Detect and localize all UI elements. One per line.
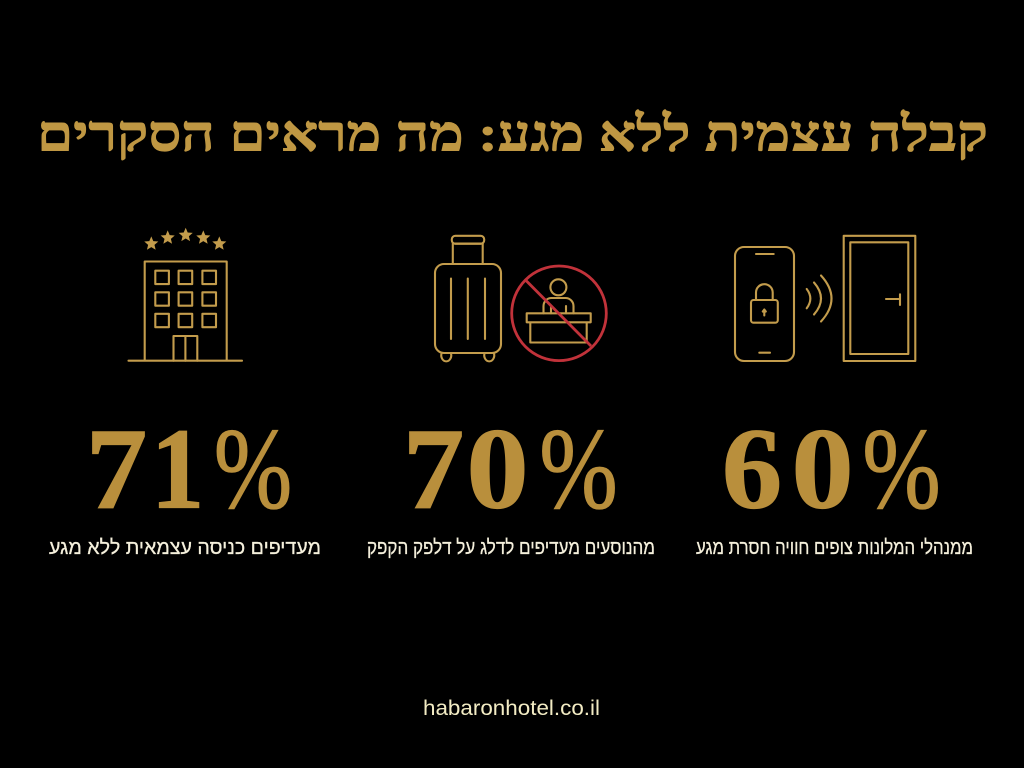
- icon: smartphone: [735, 247, 794, 361]
- icon: five stars: [144, 228, 226, 250]
- stat: 70%: [403, 404, 618, 533]
- stat: 60%: [722, 404, 941, 533]
- icon: reception desk: [527, 279, 591, 342]
- icon: luggage and crossed-out reception desk: [435, 236, 606, 361]
- icon: padlock: [751, 284, 778, 323]
- icon: phone unlocking a door: [735, 236, 915, 361]
- stat: 60%: 0: [791, 404, 854, 533]
- door: [174, 336, 197, 361]
- caption: 60%: ממנהלי המלונות צופים חוויה חסרת מגע: [696, 537, 973, 559]
- windows: [155, 271, 216, 327]
- footer website: habaronhotel.co.il: [423, 697, 600, 720]
- stat: 70%: 7: [403, 404, 464, 533]
- building: [128, 262, 242, 361]
- stat: 70%: %: [539, 404, 618, 533]
- stat: 60%: %: [862, 404, 941, 533]
- icon: prohibition sign: [512, 266, 606, 361]
- icon: door: [844, 236, 915, 361]
- title: קבלה עצמית ללא מגע: מה מראים הסקרים: [37, 106, 988, 162]
- caption: 70%: מהנוסעים מעדיפים לדלג על דלפק הקפק: [367, 537, 655, 559]
- icon: wireless waves: [807, 276, 832, 322]
- stat: 71%: [86, 404, 292, 534]
- stat: 60%: 6: [722, 405, 782, 533]
- stat: 71%: 1: [151, 406, 204, 534]
- caption: 71%: מעדיפים כניסה עצמאית ללא מגע: [49, 537, 321, 559]
- icon: suitcase: [435, 236, 501, 361]
- stat: 71%: %: [214, 404, 292, 533]
- icon: five-star hotel: [128, 228, 242, 361]
- stat: 70%: 0: [466, 404, 529, 533]
- stat: 71%: 7: [86, 404, 147, 533]
